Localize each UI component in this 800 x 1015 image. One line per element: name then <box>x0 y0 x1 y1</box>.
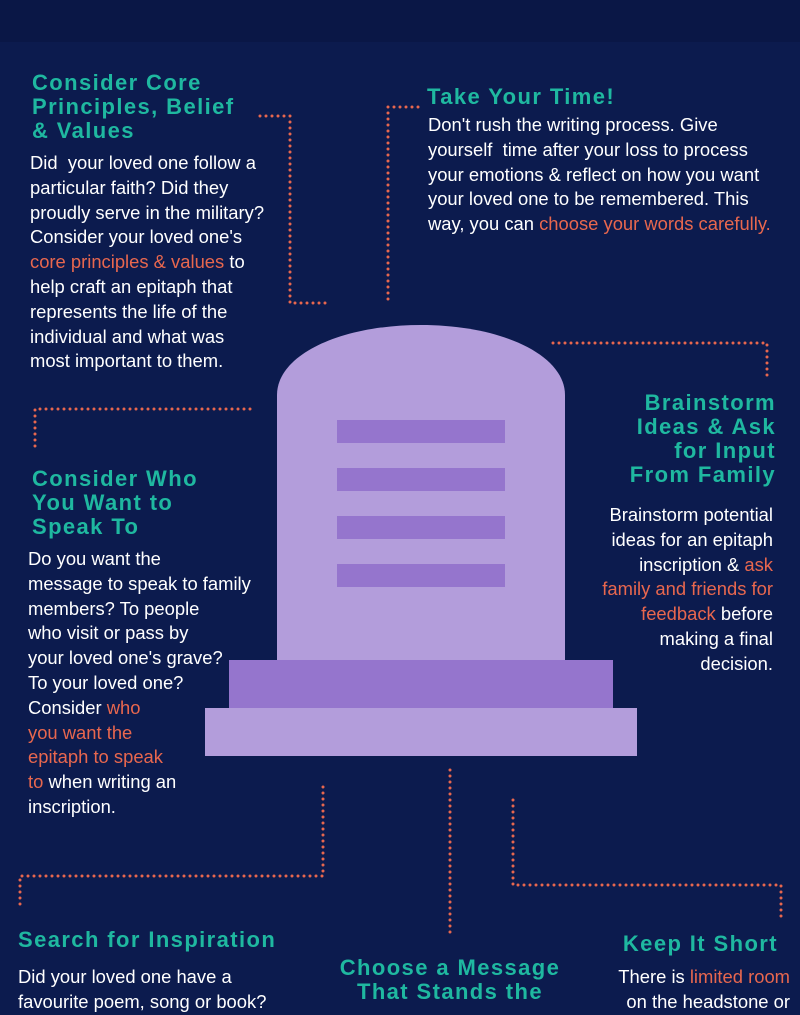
heading: who to speak to: Speak To <box>32 514 139 539</box>
text: who to speak to: epitaph to speak <box>28 746 163 767</box>
text: brainstorm: making a final <box>660 628 773 649</box>
text: take your time: your loved one to be remembered. This <box>428 188 749 209</box>
text: brainstorm: ideas for an epitaph <box>611 529 773 550</box>
text: who to speak to: who visit or pass by <box>28 622 188 643</box>
text: core principles: help craft an epitaph that <box>30 276 232 297</box>
text: keep it short <box>618 966 790 1012</box>
text: who to speak to: you want the <box>28 722 132 743</box>
heading: choose a message: Choose a Message <box>340 955 560 980</box>
text: keep it short: There is limited room <box>618 966 790 987</box>
heading: search for inspiration: Search for Inspiration <box>18 927 276 952</box>
heading: brainstorm: From Family <box>630 462 776 487</box>
text: core principles: particular faith? Did they <box>30 177 228 198</box>
text: who to speak to: To your loved one? <box>28 672 183 693</box>
heading: core principles <box>32 70 234 143</box>
text: core principles <box>30 152 264 371</box>
heading: take your time: Take Your Time! <box>427 84 615 109</box>
heading: choose a message <box>340 955 560 1004</box>
text: core principles: individual and what was <box>30 326 224 347</box>
text: take your time: yourself time after your loss to process <box>428 139 748 160</box>
text: who to speak to: Consider who <box>28 697 140 718</box>
text: core principles: Did your loved one follow a <box>30 152 256 173</box>
text: who to speak to: Do you want the <box>28 548 161 569</box>
text: brainstorm: feedback before <box>641 603 773 624</box>
heading: keep it short: Keep It Short <box>623 931 778 956</box>
text: brainstorm: family and friends for <box>602 578 773 599</box>
heading: brainstorm: for Input <box>674 438 776 463</box>
heading: who to speak to: You Want to <box>32 490 173 515</box>
text: take your time: your emotions & reflect on how you want <box>428 164 759 185</box>
heading: core principles: & Values <box>32 118 135 143</box>
text: who to speak to <box>28 548 251 817</box>
text: take your time: way, you can choose your words carefully. <box>428 213 771 234</box>
text: core principles: most important to them. <box>30 350 223 371</box>
heading: choose a message: That Stands the <box>357 979 543 1004</box>
text: brainstorm: Brainstorm potential <box>609 504 773 525</box>
text: search for inspiration: favourite poem, song or book? <box>18 991 266 1012</box>
text: who to speak to: message to speak to family <box>28 573 251 594</box>
heading: brainstorm: Brainstorm <box>645 390 776 415</box>
heading: core principles: Consider Core <box>32 70 202 95</box>
text: search for inspiration: Did your loved one have a <box>18 966 232 987</box>
text: brainstorm <box>602 504 773 674</box>
text: brainstorm: inscription & ask <box>639 554 773 575</box>
tombstone <box>205 325 637 756</box>
text: take your time: Don't rush the writing process. Give <box>428 114 718 135</box>
text: core principles: represents the life of the <box>30 301 227 322</box>
text: who to speak to: to when writing an <box>28 771 176 792</box>
text: keep it short: on the headstone or <box>626 991 790 1012</box>
heading: brainstorm <box>630 390 776 487</box>
text: search for inspiration <box>18 966 266 1012</box>
heading: who to speak to: Consider Who <box>32 466 198 491</box>
text: core principles: proudly serve in the military? <box>30 202 264 223</box>
heading: who to speak to <box>32 466 198 539</box>
text: brainstorm: decision. <box>700 653 773 674</box>
text: who to speak to: your loved one's grave? <box>28 647 223 668</box>
text: core principles: Consider your loved one's <box>30 226 242 247</box>
text: core principles: core principles & values to <box>30 251 245 272</box>
text: who to speak to: members? To people <box>28 598 199 619</box>
heading: brainstorm: Ideas & Ask <box>637 414 776 439</box>
heading: core principles: Principles, Belief <box>32 94 234 119</box>
text: take your time <box>428 114 771 234</box>
text: who to speak to: inscription. <box>28 796 116 817</box>
